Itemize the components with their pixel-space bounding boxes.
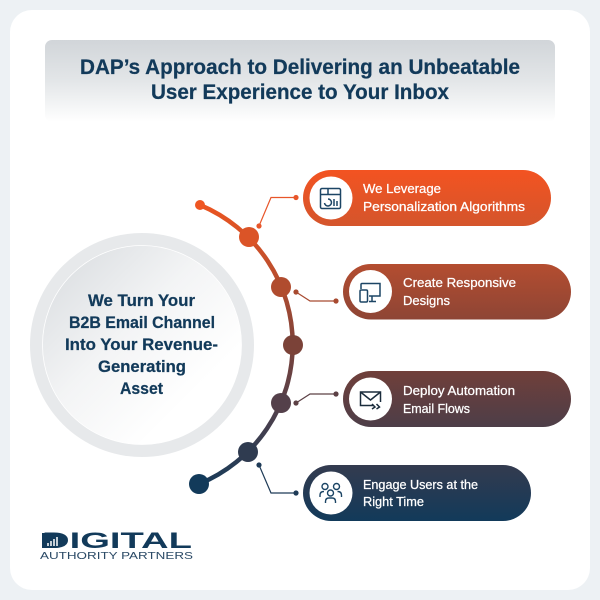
icon: users [320,484,342,503]
logo [40,528,193,562]
circle text: Generating [98,358,186,376]
title: User Experience to Your Inbox [151,81,449,104]
pill text: Engage Users at the [363,478,478,492]
pill text: Personalization Algorithms [363,200,525,214]
pill text: Right Time [363,495,424,509]
pill: responsive [343,264,571,320]
circle text: We Turn Your [88,292,196,310]
circle text: Asset [120,380,163,398]
pill text: We Leverage [363,182,441,196]
pill text: Deploy Automation [403,384,515,398]
center circle [30,233,254,457]
connector 1 [257,196,298,228]
pill text: Email Flows [403,402,470,416]
pill text [403,384,515,416]
pill: automation [343,371,571,427]
circle text: Into Your Revenue- [65,336,218,354]
pill text: Designs [403,294,450,308]
icon: devices [360,284,380,302]
timeline arc with nodes [189,200,303,494]
logo: DIGITAL [42,528,192,553]
pill text [363,478,478,509]
logo: AUTHORITY PARTNERS [40,550,193,562]
title [80,56,520,104]
connector 4 [257,463,298,495]
pill text: Create Responsive [403,276,516,290]
pill text [403,276,516,308]
title: DAP’s Approach to Delivering an Unbeatable [80,56,520,79]
title banner [45,40,555,122]
logo mark [42,533,63,548]
circle text [65,292,218,398]
connector 3 [294,392,338,405]
pill text [363,182,525,214]
icon: dashboard [320,188,340,208]
icon: email flow [360,392,380,409]
pill: personalization [303,170,551,226]
connector 2 [294,290,338,303]
pill: engage [303,465,531,521]
circle text: B2B Email Channel [69,314,215,332]
